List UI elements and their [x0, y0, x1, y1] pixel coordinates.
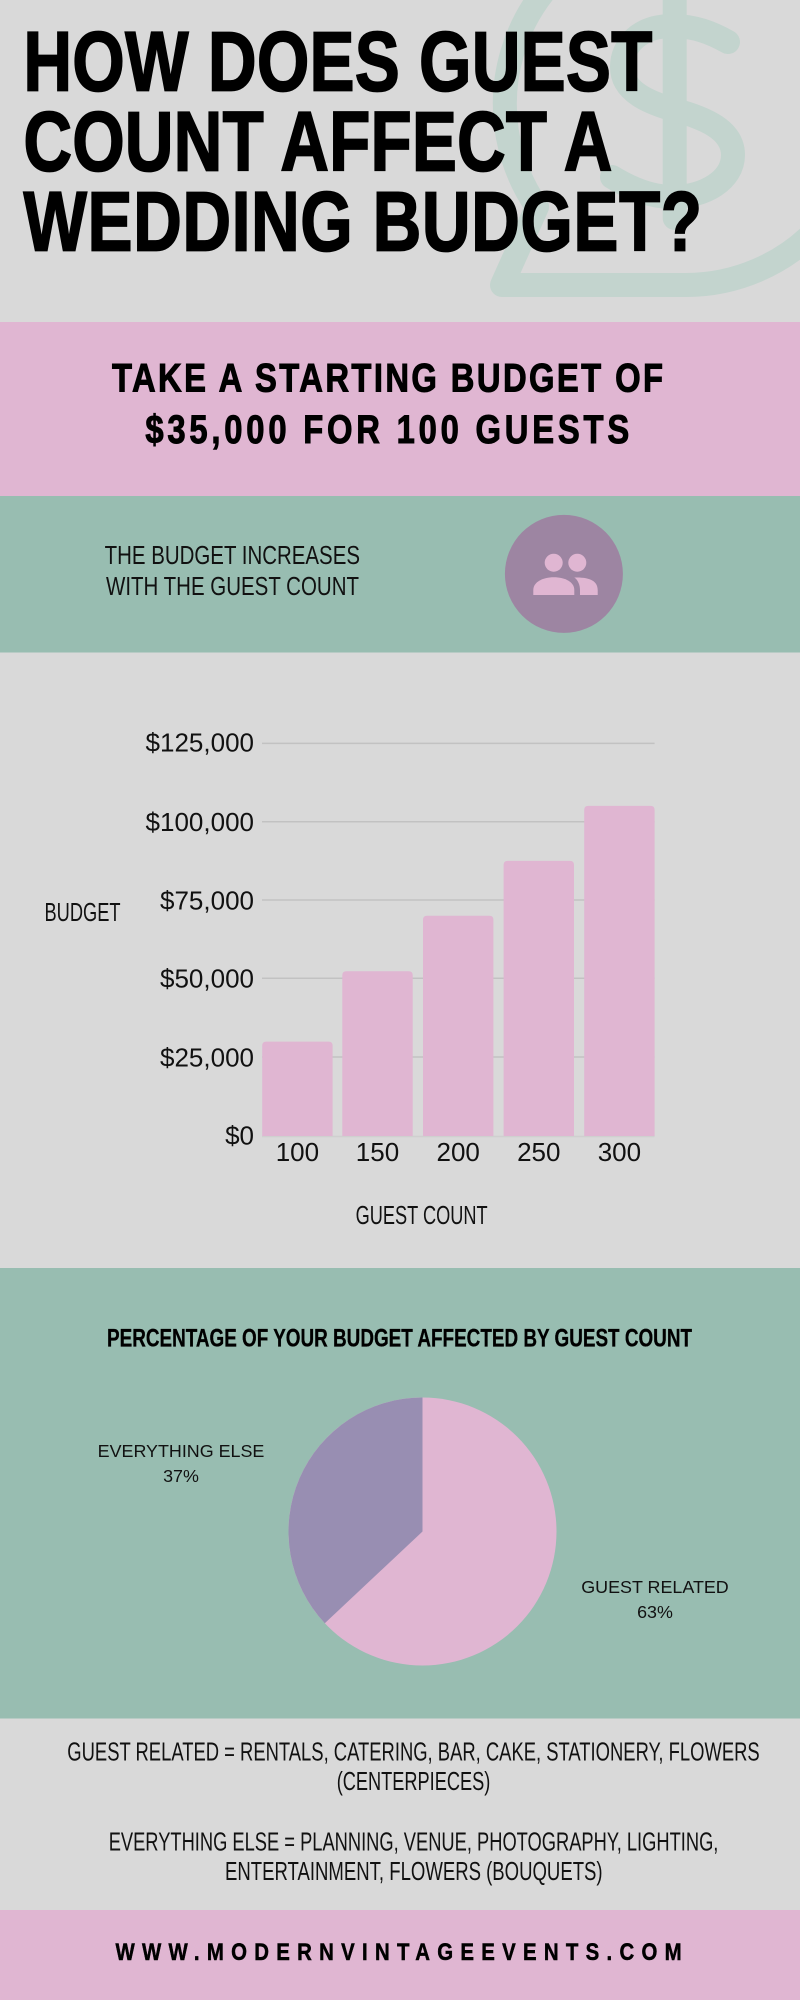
panel: starting budget: [0, 322, 800, 496]
icon: people in circle: [505, 515, 623, 633]
panel: footer: [0, 1910, 800, 2000]
heading: starting budget: [112, 355, 663, 452]
y axis labels: $25,000: [160, 1042, 254, 1072]
x axis labels: 250: [517, 1137, 560, 1167]
text: budget category definitions: (CENTERPIECES): [337, 1766, 490, 1796]
heading: starting budget: TAKE A STARTING BUDGET OF: [112, 355, 663, 400]
panel: budget increases: [0, 496, 800, 652]
text: budget category definitions: ENTERTAINMENT, FLOWERS (BOUQUETS): [225, 1856, 603, 1886]
bar chart: budget by guest count: [44, 728, 655, 1230]
icon: dollar speech bubble watermark: [502, 0, 800, 285]
x axis labels: [276, 1137, 641, 1167]
text: website: WWW.MODERNVINTAGEEVENTS.COM: [116, 1938, 682, 1965]
heading: starting budget: $35,000 FOR 100 GUESTS: [145, 407, 629, 452]
y axis labels: $75,000: [160, 885, 254, 915]
x axis labels: 100: [276, 1137, 319, 1167]
title: COUNT AFFECT A: [24, 95, 612, 189]
label: guest related: 63%: [637, 1602, 673, 1622]
label: everything else: EVERYTHING ELSE: [98, 1441, 264, 1461]
y axis labels: $100,000: [146, 807, 254, 837]
x axis labels: 300: [598, 1137, 641, 1167]
text: budget increases: WITH THE GUEST COUNT: [106, 571, 359, 601]
x axis title: GUEST COUNT: [356, 1200, 488, 1230]
text: budget category definitions: [67, 1736, 760, 1886]
y axis labels: $50,000: [160, 964, 254, 994]
text: budget increases: [105, 540, 360, 601]
x axis labels: 150: [356, 1137, 399, 1167]
y axis labels: [146, 728, 254, 1150]
title: HOW DOES GUEST: [24, 15, 652, 109]
panel: percentage pie: [0, 1268, 800, 1718]
text: budget increases: THE BUDGET INCREASES: [105, 540, 360, 570]
title: WEDDING BUDGET?: [24, 175, 702, 269]
title: [24, 15, 702, 269]
x axis labels: 200: [437, 1137, 480, 1167]
y axis labels: $125,000: [146, 728, 254, 758]
grid lines: [262, 743, 655, 1136]
label: everything else: [98, 1441, 264, 1486]
bars: [262, 806, 655, 1136]
label: guest related: [581, 1577, 729, 1622]
pie chart: [288, 1398, 556, 1666]
y axis title: BUDGET: [44, 897, 121, 927]
label: guest related: GUEST RELATED: [581, 1577, 729, 1597]
y axis labels: $0: [225, 1120, 254, 1150]
label: everything else: 37%: [163, 1466, 199, 1486]
